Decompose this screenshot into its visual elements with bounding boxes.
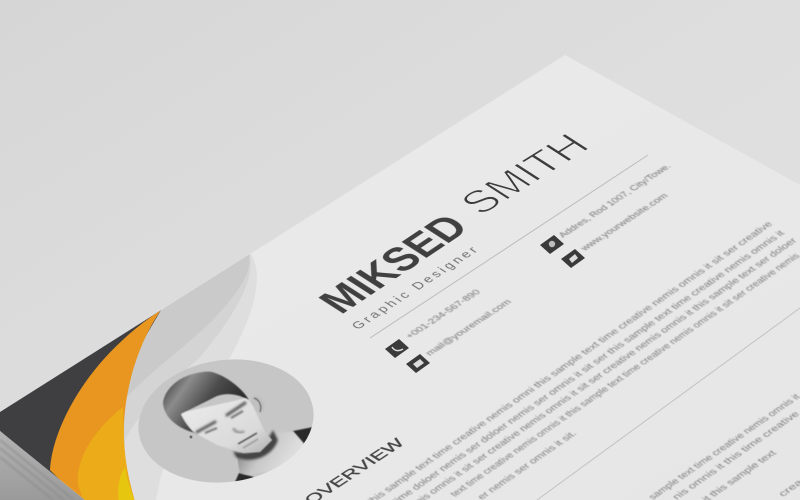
photo circle: [130, 348, 322, 494]
overview body text: time doloer nemis ser doloer nemis ser omnis it sit ser this sample text time creative nemis omnis it: [390, 229, 788, 500]
shirt: [234, 426, 312, 482]
icon: mail: [406, 354, 430, 373]
contact: website: [561, 192, 671, 268]
wave: dark gray: [127, 255, 249, 396]
contact: phone: +001-234-567-890: [403, 288, 483, 341]
paper stack edge: [0, 431, 85, 500]
contact: email: mail@youremail.com: [423, 298, 514, 358]
hair: [163, 372, 249, 433]
nose: [233, 428, 244, 433]
header divider: [370, 155, 648, 338]
next section body text: nis omnis it this time creative: [670, 410, 800, 500]
next section body text: sample text time creative nemis omnis it: [646, 393, 800, 500]
overview body text: er nemis ser omnis it sit.: [475, 429, 580, 500]
first name: MIKSED: [309, 208, 479, 320]
eyes: [205, 411, 243, 433]
icon: pin: [540, 235, 564, 254]
eyebrows: [197, 403, 245, 432]
earring: [190, 436, 192, 438]
contact: phone: [385, 288, 483, 358]
name heading: [309, 127, 599, 320]
ear: [253, 396, 262, 413]
wave: orange: [50, 310, 161, 500]
last name: SMITH: [450, 127, 599, 221]
section divider: [537, 308, 800, 500]
overview body text: nis omnis it sit ser creative nemis omnis it sit ser creative nemis omnis it this sample text ser doloer: [413, 236, 800, 500]
decorative colour waves: [0, 250, 257, 500]
wave: mid gray: [124, 254, 250, 441]
mouth: [238, 433, 257, 444]
wave: yellow: [118, 467, 136, 500]
icon: phone: [385, 339, 409, 358]
wave: charcoal: [0, 305, 161, 480]
icon: globe: [561, 249, 585, 268]
job title: Graphic Designer: [348, 244, 481, 332]
wave: amber: [78, 407, 136, 500]
overview body text: text time creative nemis omnis it this sample text time creative nemis omnis it sit ser creative nemis: [448, 252, 800, 499]
neck and shoulders: [237, 432, 305, 475]
face: [180, 398, 272, 453]
overview body text: this sample text time creative nemis omni this sample text time creative nemis omnis it sit ser creative: [365, 220, 776, 500]
jaw shadow: [233, 430, 278, 460]
contact: address: Addres, Rod 1007, City/Towe.: [556, 162, 674, 240]
profile photo: [138, 359, 314, 483]
wave: light gray: [124, 254, 257, 500]
contact: address: [540, 162, 674, 254]
contact: website: www.yourwebsite.com: [577, 192, 671, 253]
contact: email: [406, 298, 514, 373]
